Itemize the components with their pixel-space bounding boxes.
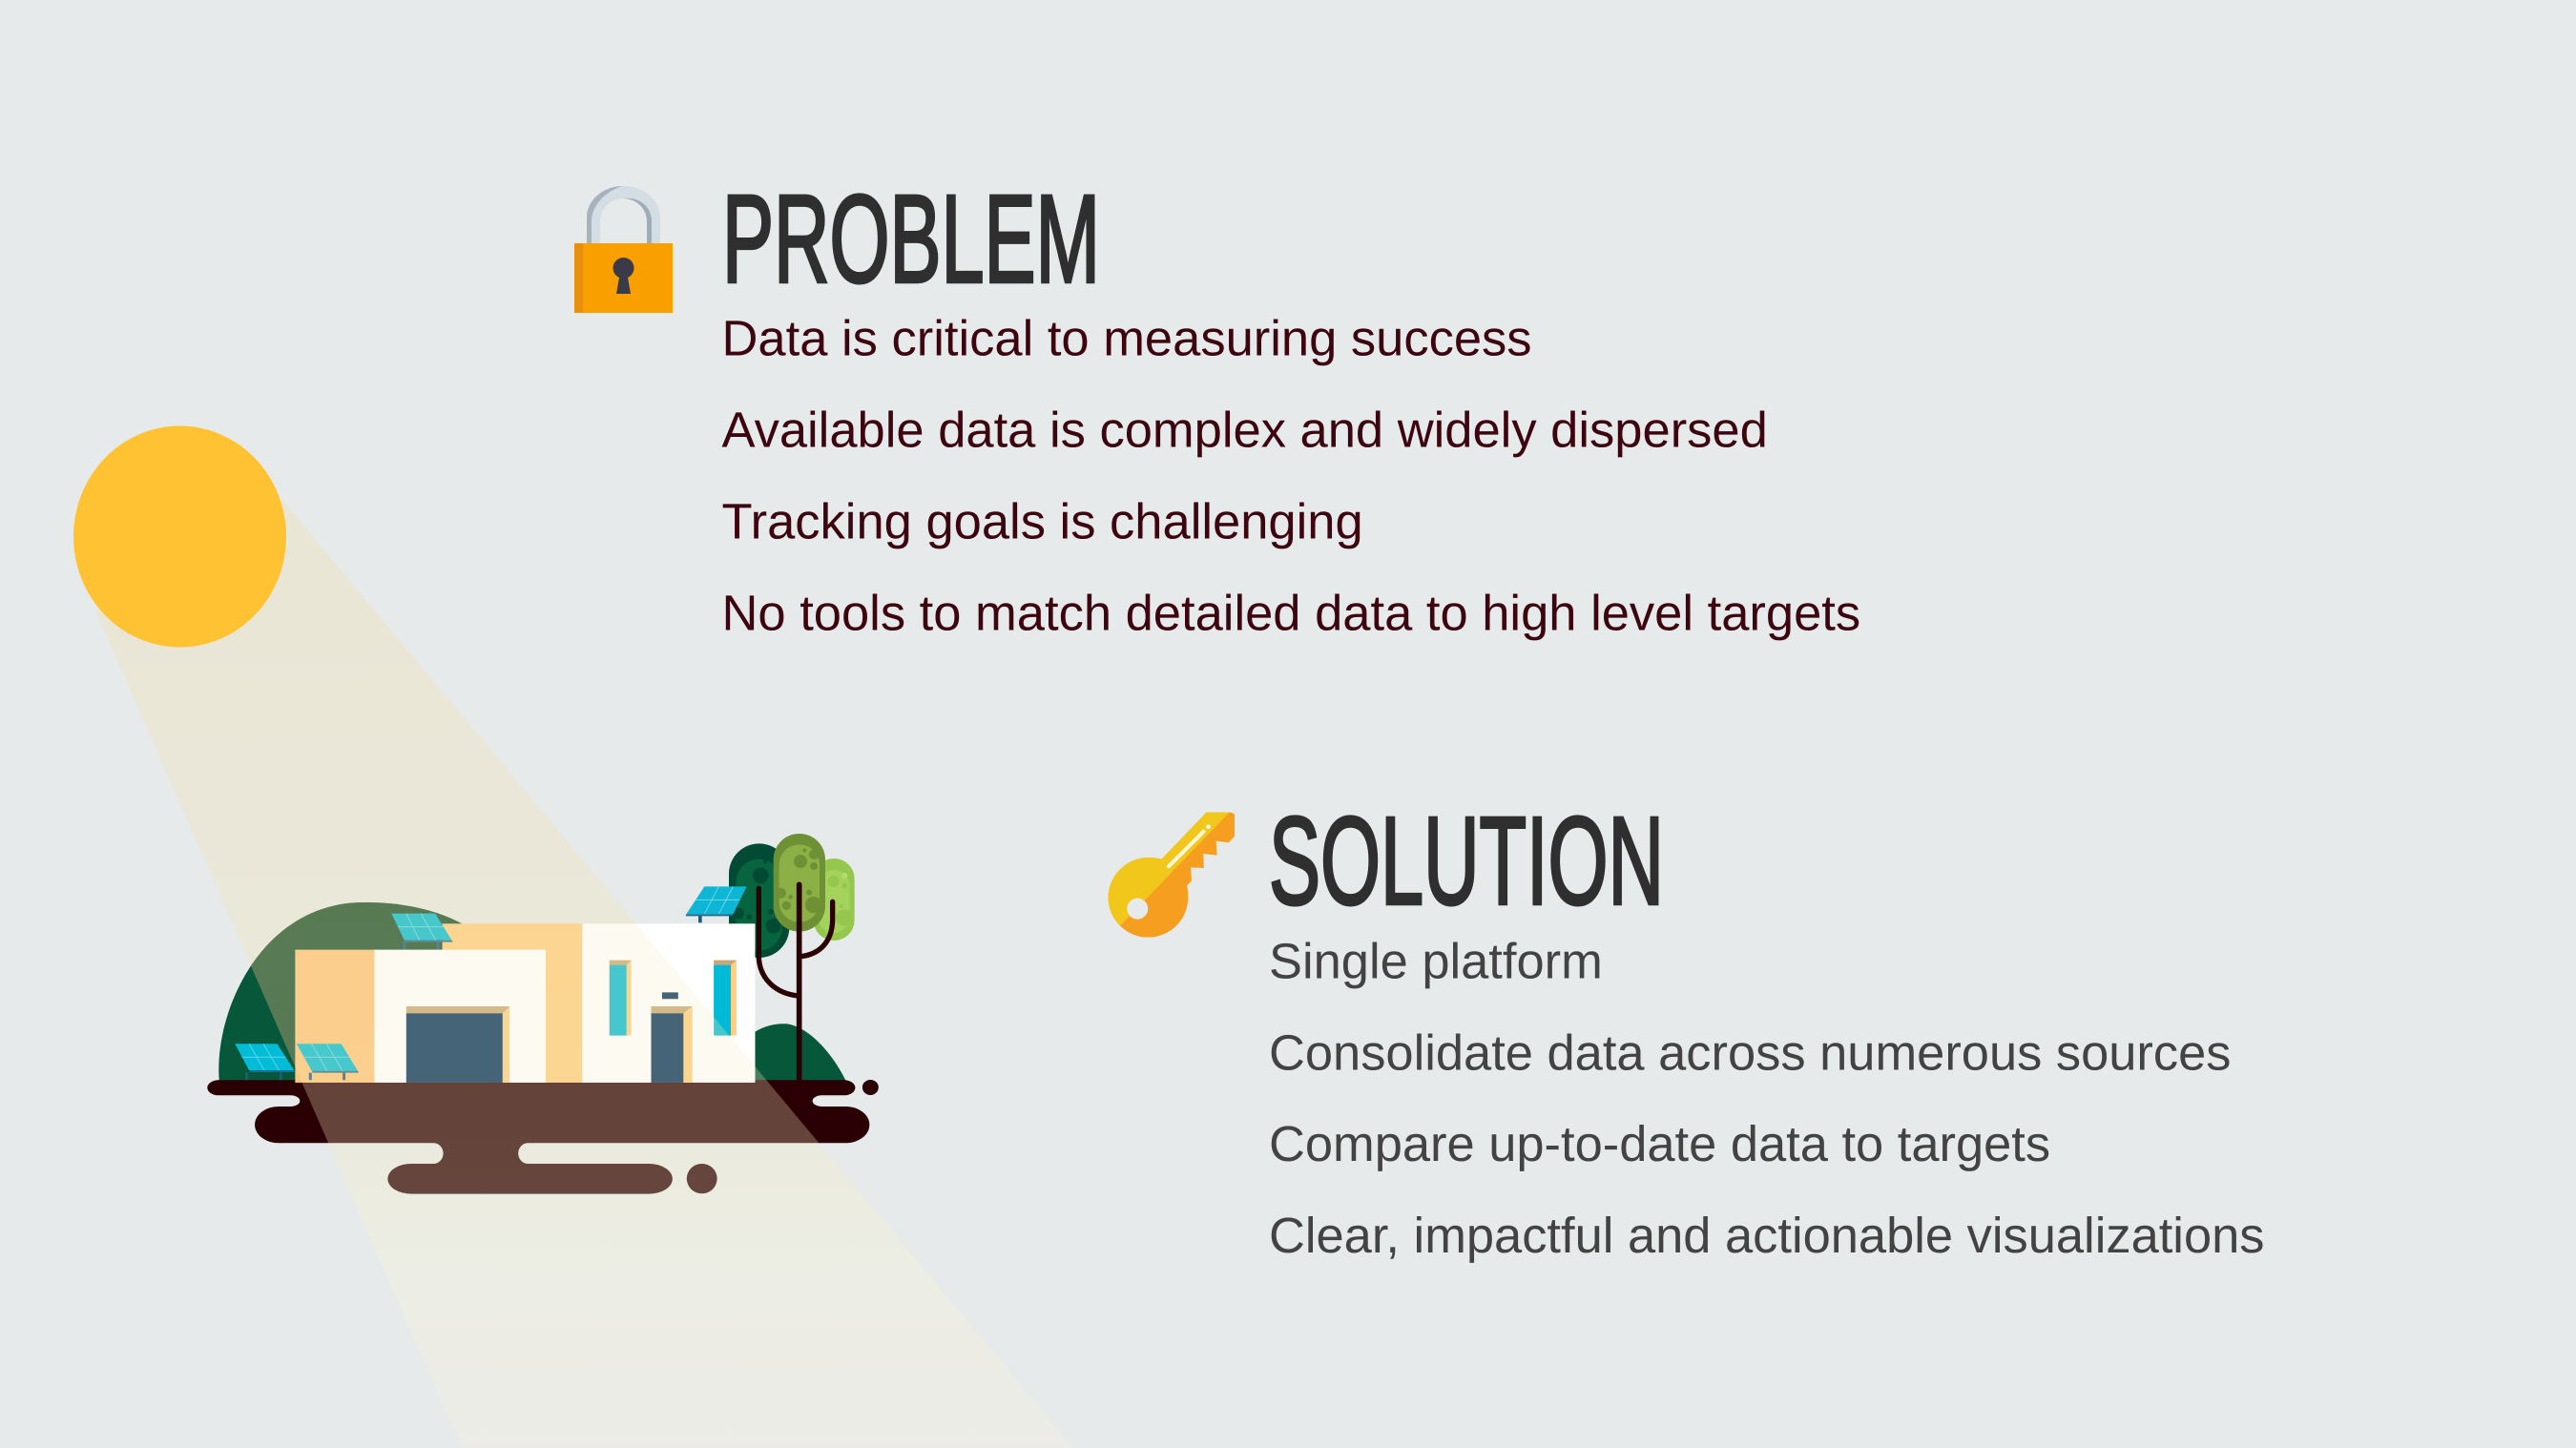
solution bullet list: Single platform [1269, 935, 1603, 990]
solution bullet list: Clear, impactful and actionable visualizations [1269, 1209, 2265, 1264]
illustration: solar-powered house on ground [207, 834, 879, 1194]
heading: problem: PROBLEM [722, 168, 1100, 309]
heading: solution: SOLUTION [1269, 790, 1664, 931]
ground panel two [297, 1044, 359, 1080]
left window [610, 961, 632, 1036]
sun beam [95, 499, 1073, 1448]
problem section [574, 168, 1860, 641]
icon: key [1109, 813, 1235, 938]
dark green tree [729, 843, 789, 958]
right wing [582, 923, 755, 1083]
problem bullet list [721, 311, 1860, 641]
solar panels on the ground [235, 1044, 359, 1080]
garage door and frame [406, 1006, 509, 1083]
solar panel on lower roof [391, 914, 453, 950]
hill behind house, left [218, 902, 499, 1081]
solar panel on roof, right [686, 886, 747, 922]
icon: padlock [574, 186, 673, 313]
solution bullet list: Consolidate data across numerous sources [1269, 1026, 2232, 1082]
solution section [1103, 790, 2265, 1264]
door sign [662, 992, 678, 999]
sun [73, 425, 286, 647]
problem bullet list: Data is critical to measuring success [721, 311, 1532, 366]
trees behind the house [729, 834, 855, 958]
ground panel one [235, 1044, 295, 1080]
problem bullet list: Tracking goals is challenging [721, 494, 1363, 549]
ground [207, 1080, 869, 1194]
hill tint inside the beam [251, 902, 462, 1066]
problem bullet list: No tools to match detailed data to high level targets [721, 586, 1860, 641]
left orange wall [295, 950, 376, 1083]
front door and frame [651, 1006, 693, 1083]
right window [714, 961, 737, 1036]
front garage wing [374, 950, 546, 1083]
wall highlight inside the beam [374, 923, 755, 1083]
light green tree [814, 858, 855, 941]
ground dots [687, 1080, 879, 1193]
tree trunks [758, 884, 833, 1085]
solution bullet list [1269, 935, 2265, 1264]
problem bullet list: Available data is complex and widely dispersed [721, 403, 1768, 458]
back orange wall [443, 923, 585, 1083]
olive green tree [774, 834, 825, 932]
solution bullet list: Compare up-to-date data to targets [1269, 1117, 2050, 1172]
house building [295, 914, 755, 1083]
hill behind house, right [755, 1024, 846, 1083]
